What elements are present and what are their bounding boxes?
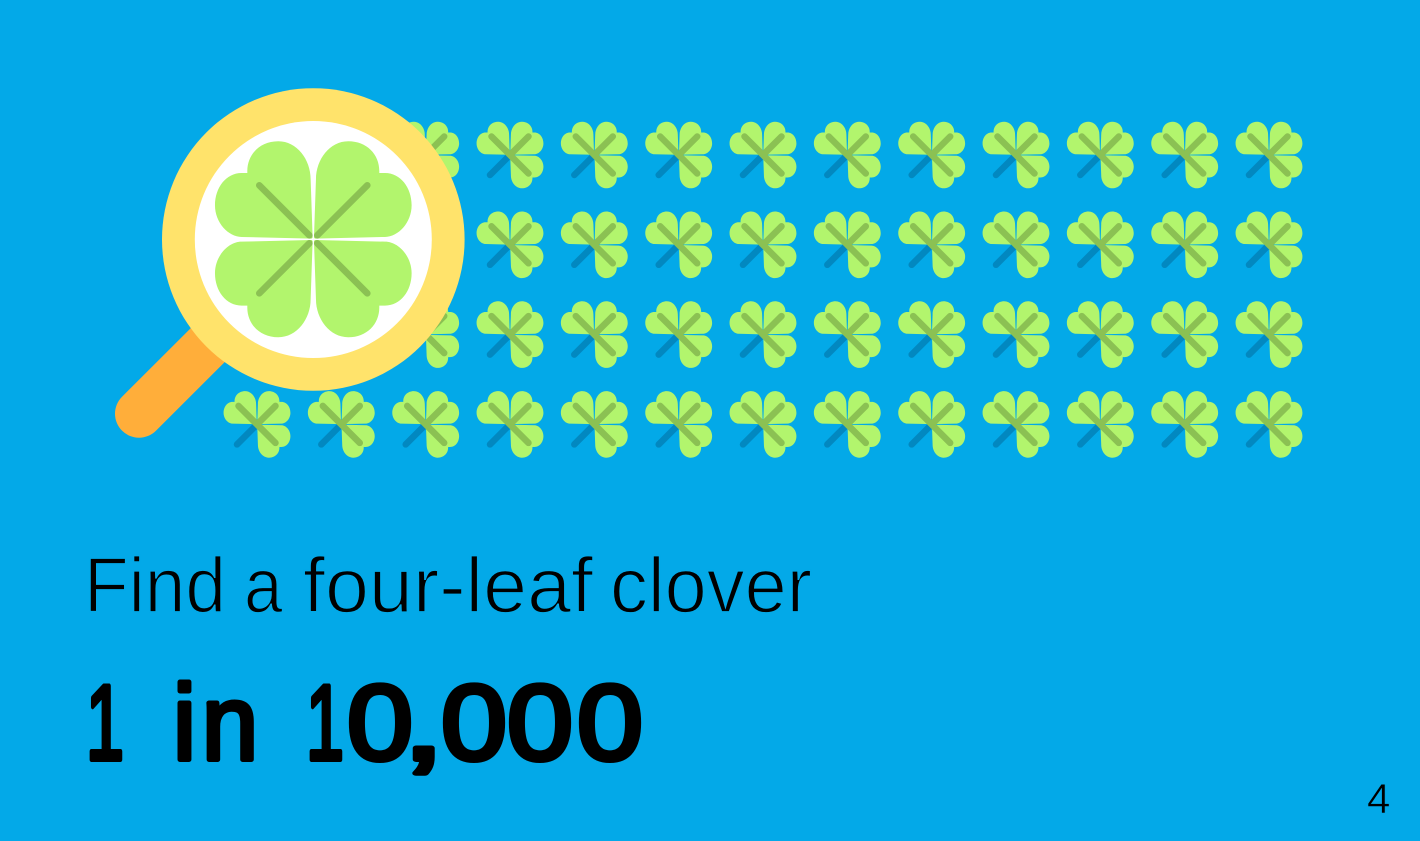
icon: magnifying glass (139, 88, 465, 414)
big statistic: n (202, 662, 258, 782)
magnifier handle (139, 293, 260, 414)
clover row 4 (224, 391, 1302, 458)
heading: four-leaf (303, 541, 593, 629)
big statistic: i (173, 662, 196, 782)
page number: 4 (1367, 775, 1390, 822)
heading: clover (610, 541, 812, 629)
big statistic: 0 (347, 662, 413, 782)
big statistic: , (402, 662, 445, 782)
big statistic: 1 (86, 662, 124, 782)
clover row 3 (392, 301, 1302, 368)
big statistic: 0 (507, 662, 573, 782)
magnifier rim (162, 88, 465, 391)
icon: four-leaf clover (215, 141, 412, 337)
clover row 1 (392, 122, 1302, 188)
magnifier lens (195, 121, 432, 358)
heading: Find (84, 541, 226, 629)
big statistic: 1 (306, 662, 344, 782)
big statistic: 0 (577, 662, 643, 782)
heading: a (244, 541, 283, 629)
clover grid (224, 122, 1302, 458)
clover row 2 (477, 211, 1302, 278)
big statistic: 0 (441, 662, 507, 782)
